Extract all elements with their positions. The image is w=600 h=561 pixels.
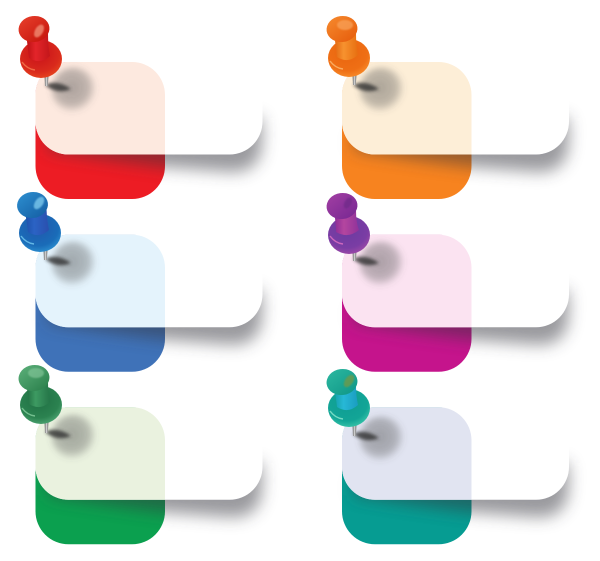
white card bbox=[36, 235, 262, 327]
card shadow bbox=[354, 455, 568, 517]
panel: magenta label bbox=[342, 235, 569, 372]
panel: blue label bbox=[36, 235, 262, 372]
green tab bbox=[36, 407, 165, 544]
icon: green push pin bbox=[17, 363, 97, 460]
white card bbox=[36, 62, 262, 154]
tinted note bbox=[342, 235, 472, 327]
icon: red push pin bbox=[17, 14, 97, 113]
white card bbox=[36, 407, 262, 500]
card shadow bbox=[354, 283, 568, 345]
panel: orange label bbox=[342, 62, 569, 199]
white card bbox=[342, 407, 569, 500]
white card bbox=[342, 62, 569, 154]
icon: blue push pin bbox=[15, 190, 97, 287]
card shadow bbox=[48, 455, 262, 517]
card shadow bbox=[354, 110, 568, 172]
panel: teal label bbox=[342, 407, 569, 544]
icon: teal push pin bbox=[325, 367, 405, 462]
orange tab bbox=[342, 62, 472, 199]
magenta tab bbox=[342, 235, 472, 372]
tinted note bbox=[342, 407, 472, 500]
tinted note bbox=[342, 62, 472, 154]
red tab bbox=[36, 62, 165, 199]
icon: orange push pin bbox=[325, 14, 405, 113]
panel: green label bbox=[36, 407, 262, 544]
tinted note bbox=[36, 62, 165, 154]
card shadow bbox=[48, 110, 262, 172]
panel: red label bbox=[36, 62, 262, 199]
tinted note bbox=[36, 407, 165, 500]
tinted note bbox=[36, 235, 165, 327]
card shadow bbox=[48, 283, 262, 345]
teal tab bbox=[342, 407, 472, 544]
icon: purple push pin bbox=[325, 191, 405, 287]
blue tab bbox=[36, 235, 165, 372]
white card bbox=[342, 235, 569, 327]
